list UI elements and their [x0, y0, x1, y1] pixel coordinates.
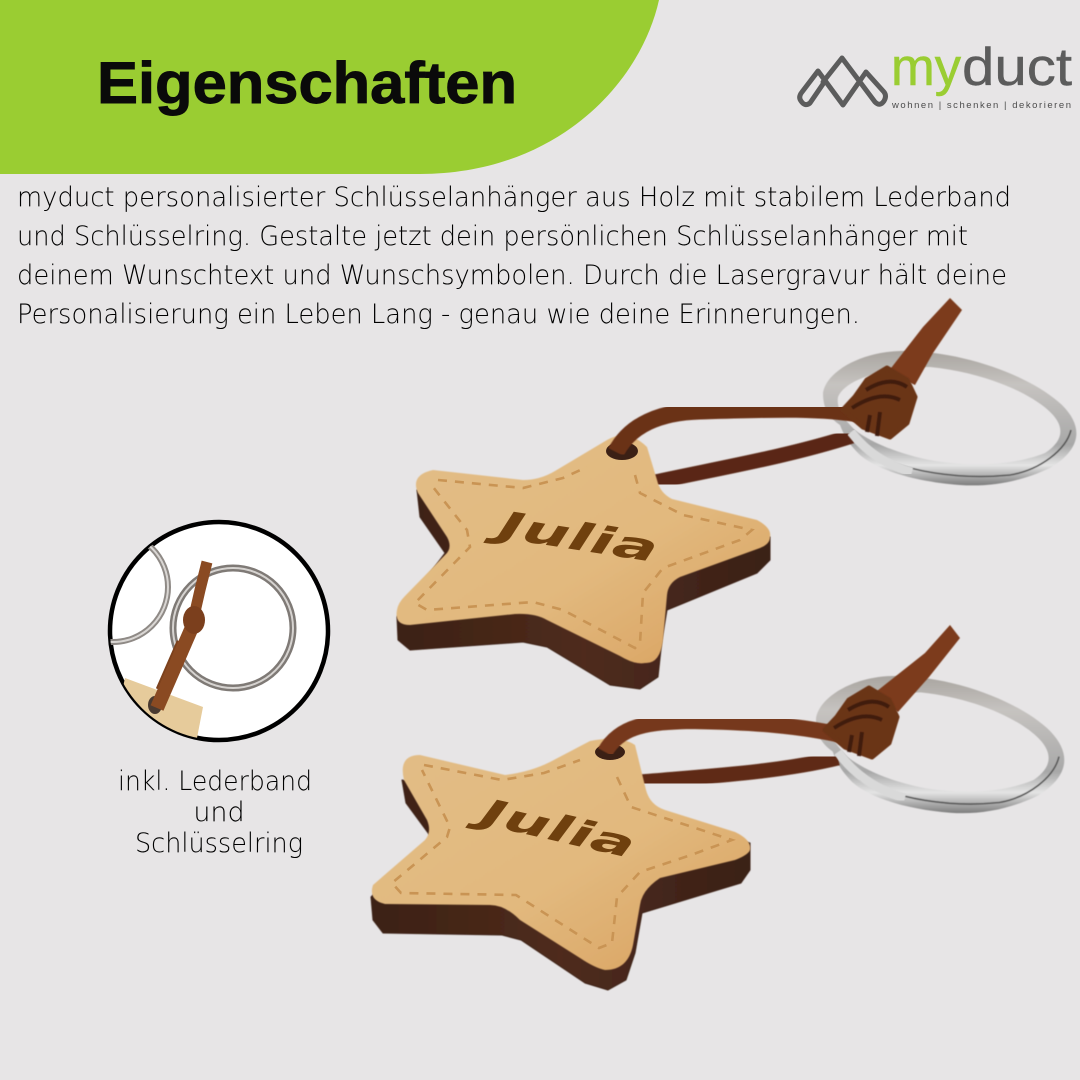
ring front	[851, 432, 912, 472]
circle backing	[110, 522, 328, 740]
engraved name: Julia	[463, 788, 641, 867]
star edge	[371, 780, 750, 990]
description text: myduct personalisierter Schlüsselanhänger aus Holz mit stabilem Lederband	[17, 182, 1011, 213]
ring front	[838, 752, 905, 798]
green header shape	[0, 0, 659, 174]
detail circle	[108, 520, 330, 742]
ring	[816, 676, 1064, 813]
title: Eigenschaften	[97, 51, 517, 116]
strap tail	[888, 298, 962, 385]
stitching	[415, 467, 752, 648]
caption: Schlüsselring	[135, 828, 303, 859]
logo: myduct: duct	[962, 38, 1072, 97]
upper strap	[616, 409, 865, 452]
lower strap	[655, 436, 852, 482]
main ring	[173, 568, 293, 688]
punched hole	[595, 744, 625, 760]
description text: Personalisierung ein Leben Lang - genau wie deine Erinnerungen.	[17, 299, 860, 330]
logo tagline: wohnen | schenken | dekorieren	[891, 100, 1071, 111]
strap	[160, 642, 181, 690]
star face	[372, 739, 750, 970]
engraved name: Julia	[482, 501, 663, 571]
punched hole	[606, 442, 638, 460]
strap tail	[872, 625, 960, 712]
stitching	[392, 760, 732, 948]
logo wordmark: my	[891, 38, 961, 97]
hole	[148, 696, 162, 714]
caption	[118, 766, 312, 859]
knot	[825, 688, 897, 757]
description text: und Schlüsselring. Gestalte jetzt dein persönlichen Schlüsselanhänger mit	[17, 221, 968, 252]
keychain: lower star	[371, 625, 1064, 990]
knot	[843, 368, 915, 437]
knot	[183, 606, 205, 634]
upper strap	[605, 721, 850, 752]
star face	[397, 435, 770, 663]
circle contents	[110, 544, 296, 738]
icon: mountains	[800, 58, 886, 105]
description text: deinem Wunschtext und Wunschsymbolen. Durch die Lasergravur hält deine	[17, 260, 1007, 291]
wood tag	[124, 678, 203, 738]
second ring	[110, 544, 171, 645]
caption: inkl. Lederband	[118, 766, 312, 797]
logo: myduct	[800, 38, 1072, 111]
description text	[17, 182, 1011, 330]
ring	[823, 351, 1076, 485]
caption: und	[193, 797, 245, 828]
star edge	[397, 490, 770, 689]
keychain: upper star	[397, 298, 1076, 689]
lower strap	[640, 758, 838, 782]
